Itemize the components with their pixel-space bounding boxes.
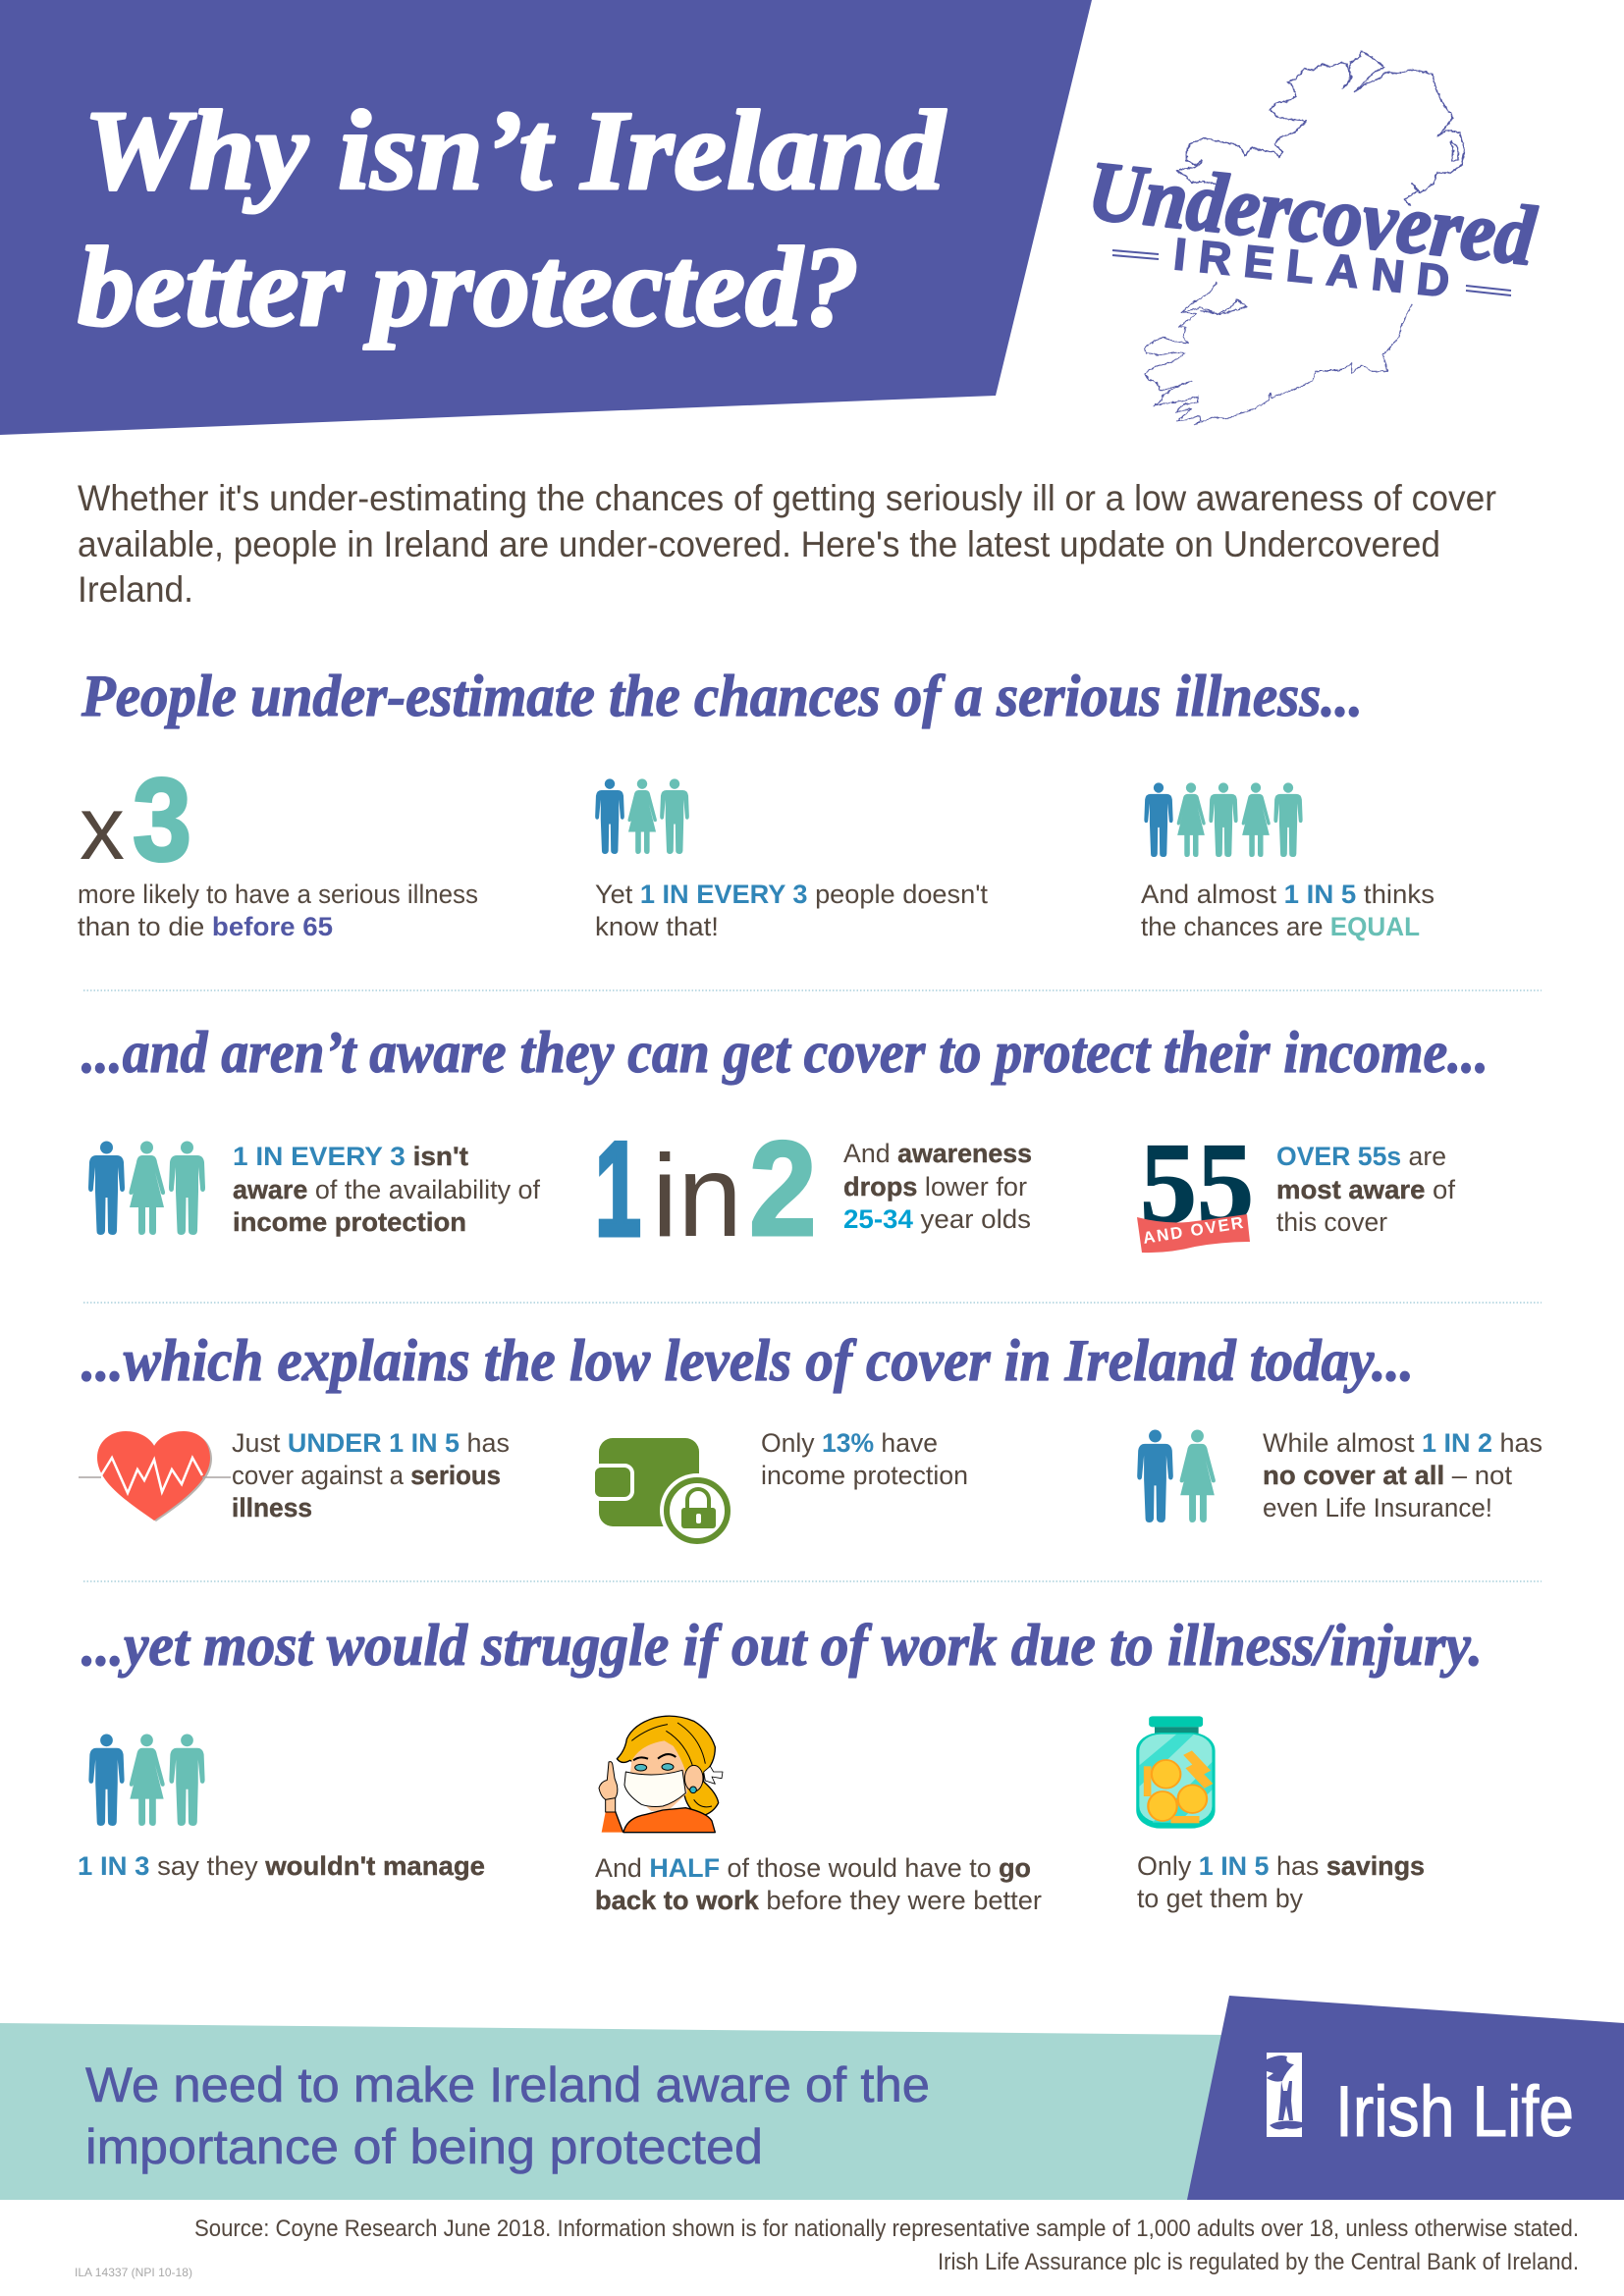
text: half go back to work — [595, 1853, 1042, 1915]
call to action text: importance of being protected — [85, 2119, 763, 2174]
text: 1 in 5 savings: Only 1 IN 5 has savings — [1137, 1851, 1425, 1881]
text: half go back to work: And HALF of those would have to go — [595, 1853, 1031, 1883]
source notes — [194, 2216, 1579, 2275]
icon: jar of coins — [1136, 1716, 1216, 1829]
icon: heart with pulse — [79, 1431, 231, 1522]
stat: 1 in 2: in — [652, 1131, 742, 1261]
text: 1 in every 3: know that! — [595, 912, 719, 941]
text: income protection awareness — [233, 1142, 540, 1237]
text: under 1 in 5: Just UNDER 1 IN 5 has — [232, 1428, 510, 1458]
heading: serious illness: People under-estimate the chances of a serious illness... — [81, 664, 1363, 728]
stat: 1 in 2 — [595, 1113, 817, 1263]
text: 1 in 5 — [1141, 880, 1435, 941]
panel: no cover at all — [1137, 1428, 1543, 1522]
text: half go back to work: back to work before they were better — [595, 1886, 1042, 1915]
text: over 55s: this cover — [1276, 1207, 1387, 1237]
text: awareness drops: And awareness — [843, 1139, 1032, 1168]
text: more likely: than to die before 65 — [78, 912, 333, 941]
source notes: Irish Life Assurance plc is regulated by the Central Bank of Ireland. — [938, 2249, 1579, 2275]
call to action text — [85, 2057, 930, 2174]
text: awareness drops: 25-34 year olds — [843, 1204, 1031, 1234]
text: over 55s: most aware of — [1276, 1175, 1455, 1204]
panel: savings — [1136, 1716, 1425, 1913]
icon: woman in face mask — [599, 1716, 723, 1833]
icon: Irish Life emblem — [1267, 2053, 1302, 2137]
title: Why isn’t Ireland — [83, 88, 947, 213]
text: awareness drops — [843, 1139, 1032, 1234]
text: 1 in 2 no cover: While almost 1 IN 2 has — [1263, 1428, 1543, 1458]
text: 1 in every 3 — [595, 880, 988, 941]
text: 1 in 5: And almost 1 IN 5 thinks — [1141, 880, 1435, 909]
text: awareness drops: drops lower for — [843, 1172, 1027, 1201]
title — [78, 88, 947, 349]
panel: 1 in 5 thinks equal — [1141, 782, 1435, 941]
logo word: Undercovered: Undercovered — [1084, 142, 1541, 284]
header banner — [0, 0, 1092, 435]
badge: 55 and over: AND OVER — [1142, 1213, 1244, 1248]
stat: x3 — [80, 755, 191, 885]
text: income protection awareness: 1 IN EVERY 3 isn't — [233, 1142, 468, 1171]
badge: 55 and over: 55 — [1140, 1119, 1254, 1248]
text: only 13%: Only 13% have — [761, 1428, 938, 1458]
panel: Irish Life logo — [1187, 1996, 1624, 2200]
text: 1 in 3: 1 IN 3 say they wouldn't manage — [78, 1851, 485, 1881]
intro paragraph — [78, 478, 1496, 610]
panel: 1 in every 3 doesn't know — [595, 778, 988, 941]
text: over 55s: OVER 55s are — [1276, 1142, 1446, 1171]
text: 1 in 5 savings: to get them by — [1137, 1884, 1303, 1913]
icon: couple — [1137, 1429, 1216, 1522]
intro paragraph: Ireland. — [78, 569, 193, 610]
panel: footer call to action — [0, 2023, 1227, 2200]
text: income protection awareness: aware of the availability of — [233, 1175, 540, 1204]
stat: x3: x — [80, 778, 125, 879]
panel: wouldn't manage — [78, 1734, 485, 1881]
text: over 55s — [1276, 1142, 1455, 1237]
stat: 1 in 2: 2 — [749, 1113, 817, 1263]
text: 1 in 5 savings — [1137, 1851, 1425, 1913]
panel: 1 in 2 — [595, 1113, 1032, 1263]
intro paragraph: available, people in Ireland are under-covered. Here's the latest update on Undercovered — [78, 524, 1440, 564]
text: 1 in 2 no cover: even Life Insurance! — [1263, 1493, 1492, 1522]
panel: x3 more likely — [78, 755, 478, 941]
panel: serious illness cover — [79, 1428, 510, 1522]
map of Ireland outline — [1145, 51, 1465, 425]
icon: five people — [1144, 782, 1303, 857]
teal band — [0, 2023, 1227, 2200]
panel: 1 in every 3 unaware — [88, 1141, 540, 1237]
logo rules — [1112, 250, 1511, 295]
icon: three people — [88, 1141, 205, 1235]
text: 1 in 2 no cover: no cover at all – not — [1263, 1461, 1512, 1490]
text: 1 in every 3: Yet 1 IN EVERY 3 people doesn't — [595, 880, 988, 909]
stat: x3: 3 — [133, 755, 191, 885]
text: more likely: more likely to have a serious illness — [78, 880, 478, 909]
logo word: IRELAND: IRELAND — [1171, 228, 1452, 306]
text: income protection awareness: income protection — [233, 1207, 466, 1237]
heading: would struggle: ...yet most would struggle if out of work due to illness/injury. — [81, 1613, 1483, 1678]
logo: Undercovered Ireland with map outline — [1084, 51, 1541, 425]
heading: low levels of cover: ...which explains the low levels of cover in Ireland today... — [81, 1328, 1414, 1393]
reference code: ILA 14337 (NPI 10-18) — [75, 2266, 192, 2279]
title: better protected? — [78, 225, 859, 349]
heading: awareness of cover: ...and aren’t aware they can get cover to protect their income... — [81, 1020, 1489, 1085]
intro paragraph: Whether it's under-estimating the chances of getting seriously ill or a low awareness of cover — [78, 478, 1496, 518]
text: more likely — [78, 880, 478, 941]
text: 1 in 2 no cover — [1263, 1428, 1543, 1522]
wordmark: Irish Life — [1335, 2072, 1574, 2152]
panel: over 55s — [1137, 1119, 1455, 1253]
icon: three people — [595, 778, 689, 854]
text: only 13% — [761, 1428, 968, 1490]
icon: three people — [88, 1734, 205, 1826]
text: only 13%: income protection — [761, 1461, 968, 1490]
text: under 1 in 5: cover against a serious — [232, 1461, 501, 1490]
panel: back to work — [595, 1716, 1042, 1915]
text: under 1 in 5: illness — [232, 1493, 312, 1522]
panel: income protection — [593, 1428, 968, 1548]
text: under 1 in 5 — [232, 1428, 510, 1522]
stat: 1 in 2: 1 — [595, 1114, 641, 1263]
purple block — [1187, 1996, 1624, 2200]
call to action text: We need to make Ireland aware of the — [85, 2057, 930, 2112]
icon: wallet with padlock — [593, 1438, 734, 1548]
text: 1 in 5: the chances are EQUAL — [1141, 912, 1420, 941]
